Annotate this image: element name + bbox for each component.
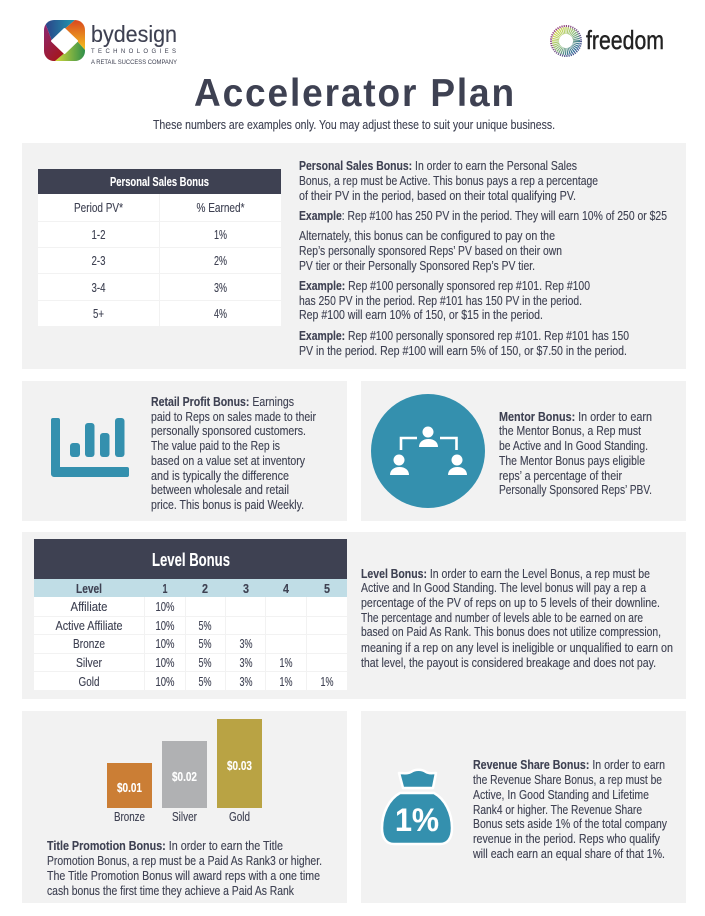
icon: money bag 1%: 1% (395, 802, 439, 838)
table: level bonus (34, 539, 347, 690)
table: personal sales bonus (38, 169, 281, 326)
text: retail profit bonus description: between wholesale and retail (151, 482, 289, 497)
table: level bonus: 3 (243, 581, 249, 596)
icon: money bag 1% (382, 770, 452, 844)
table: personal sales bonus: 2-3 (92, 253, 106, 268)
logo: bydesign technologies: bydesign (91, 21, 177, 47)
table: level bonus: 10% (156, 618, 175, 633)
table: personal sales bonus: 4% (214, 306, 227, 321)
table: level bonus: 5% (198, 674, 212, 689)
text: retail profit bonus description: based on a value set at inventory (151, 453, 305, 468)
text: personal sales bonus description: PV in the period. Rep #100 will earn 5% of 150, or $7.50 in the period. (299, 343, 627, 358)
table: personal sales bonus: 1-2 (92, 227, 106, 242)
table: level bonus: 5% (198, 618, 212, 633)
text: personal sales bonus description: Example: Rep #100 personally sponsored rep #101. Rep #101 has 150 (299, 328, 629, 343)
panel: mentor bonus (361, 381, 686, 521)
icon: bar chart (51, 418, 129, 477)
text: revenue share bonus description: Active, In Good Standing and Lifetime (473, 787, 649, 802)
text: retail profit bonus description: Retail Profit Bonus: Earnings (151, 394, 294, 409)
text: revenue share bonus description: will each earn an equal share of that 1%. (472, 846, 665, 861)
bar chart: title promotion amounts: $0.02 (172, 769, 197, 784)
table: level bonus: 3% (240, 636, 253, 651)
logo: bydesign technologies: TECHNOLOGIES (91, 49, 176, 55)
text: title promotion bonus description: Promotion Bonus, a rep must be a Paid As Rank3 or higher. (47, 853, 322, 868)
text: retail profit bonus description: and is typically the difference (151, 468, 289, 483)
text: retail profit bonus description (151, 394, 317, 512)
text: personal sales bonus description: Personal Sales Bonus: In order to earn the Personal Sales (299, 158, 577, 173)
table: level bonus: 5% (198, 636, 212, 651)
text: level bonus description: Level Bonus: In order to earn the Level Bonus, a rep must be (361, 566, 650, 581)
table: level bonus: 10% (156, 599, 175, 614)
bar chart: title promotion amounts: $0.01 (117, 780, 142, 795)
bar chart: title promotion amounts: Gold (229, 809, 250, 824)
table: level bonus: Gold (78, 674, 100, 689)
text: personal sales bonus description: Bonus, a rep must be Active. This bonus pays a rep a percentage (299, 173, 598, 188)
text: retail profit bonus description: The value paid to the Rep is (151, 438, 280, 453)
text: revenue share bonus description: Rank4 or higher. The Revenue Share (473, 802, 642, 817)
table: level bonus: 1% (320, 674, 334, 689)
table: level bonus: Level Bonus (152, 550, 230, 570)
text: personal sales bonus description: PV tier or their Personally Sponsored Rep’s PV tier. (299, 258, 535, 273)
table: level bonus: 5% (198, 655, 212, 670)
text: retail profit bonus description: personally sponsored customers. (151, 423, 306, 438)
text: personal sales bonus description: Rep’s personally sponsored Reps’ PV based on their own (299, 243, 562, 258)
table: personal sales bonus: 2% (214, 253, 227, 268)
table: level bonus: 2 (202, 581, 208, 596)
text: personal sales bonus description: Alternately, this bonus can be configured to pay on the (299, 228, 555, 243)
bar chart: title promotion amounts: Silver (172, 809, 198, 824)
text: mentor bonus description (499, 409, 652, 497)
title: Accelerator Plan (194, 72, 514, 115)
text: personal sales bonus description: has 250 PV in the period. Rep #101 has 150 PV in the period. (299, 293, 582, 308)
text: retail profit bonus description: price. This bonus is paid Weekly. (151, 497, 304, 512)
text: level bonus description (361, 566, 673, 670)
table: personal sales bonus: Period PV* (74, 200, 123, 215)
text: level bonus description: Active and In Good Standing. The level bonus will pay a rep a (361, 580, 647, 595)
table: level bonus: 10% (156, 655, 175, 670)
text: mentor bonus description: reps’ a percentage of their (499, 468, 623, 483)
bar chart: title promotion amounts (107, 719, 262, 824)
text: personal sales bonus description: of their PV in the period, based on their total qualifying PV. (299, 188, 576, 203)
text: title promotion bonus description: The Title Promotion Bonus will award reps with a one time (47, 868, 320, 883)
text: mentor bonus description: Mentor Bonus: In order to earn (499, 409, 652, 424)
panel: level bonus (22, 532, 686, 699)
table: personal sales bonus: 3-4 (92, 280, 106, 295)
logo: bydesign technologies: A RETAIL SUCCESS COMPANY (91, 60, 177, 66)
table: personal sales bonus: 3% (214, 280, 227, 295)
table: level bonus: 10% (156, 674, 175, 689)
bar chart: title promotion amounts: $0.03 (227, 758, 252, 773)
text: revenue share bonus description: Revenue Share Bonus: In order to earn (473, 757, 665, 772)
panel: retail profit bonus (22, 381, 347, 521)
table: level bonus: 10% (156, 636, 175, 651)
table: level bonus: 5 (324, 581, 330, 596)
table: level bonus: Active Affiliate (56, 618, 122, 633)
table: level bonus: 1 (162, 581, 168, 596)
panel: personal sales bonus (22, 143, 686, 369)
bar chart: title promotion amounts: Bronze (114, 809, 145, 824)
icon: mentor network circle (371, 394, 485, 508)
text: title promotion bonus description (47, 838, 322, 898)
text: personal sales bonus description: Example: Rep #100 personally sponsored rep #101. Rep #100 (299, 278, 590, 293)
logo: freedom (551, 25, 664, 56)
table: level bonus: 1% (280, 674, 293, 689)
table: level bonus: 3% (240, 674, 253, 689)
text: personal sales bonus description: Rep #100 will earn 10% of 150, or $15 in the period. (299, 307, 543, 322)
text: mentor bonus description: be Active and In Good Standing. (499, 438, 648, 453)
text: title promotion bonus description: Title Promotion Bonus: In order to earn the Title (47, 838, 283, 853)
panel: title promotion bonus (22, 711, 347, 903)
text: mentor bonus description: Personally Sponsored Reps’ PBV. (499, 482, 652, 497)
text: mentor bonus description: the Mentor Bonus, a Rep must (499, 423, 641, 438)
logo: freedom: freedom (586, 25, 664, 55)
table: level bonus: 1% (280, 655, 293, 670)
table: level bonus: 3% (240, 655, 253, 670)
text: retail profit bonus description: paid to Reps on sales made to their (151, 409, 317, 424)
text: revenue share bonus description: revenue in the period. Reps who qualify (473, 831, 660, 846)
table: level bonus: 4 (283, 581, 290, 596)
table: level bonus: Level (76, 581, 102, 596)
table: level bonus: Bronze (73, 636, 105, 651)
logo: bydesign technologies (44, 20, 177, 66)
table: personal sales bonus: 1% (214, 227, 227, 242)
table: level bonus: Affiliate (70, 599, 108, 614)
table: personal sales bonus: Personal Sales Bonus (110, 174, 209, 189)
subtitle: These numbers are examples only. You may adjust these to suit your unique business. (153, 117, 555, 132)
text: mentor bonus description: The Mentor Bonus pays eligible (499, 453, 645, 468)
table: level bonus: Silver (76, 655, 103, 670)
panel: revenue share bonus (361, 711, 686, 903)
text: title promotion bonus description: cash bonus the first time they achieve a Paid As Rank (47, 883, 294, 898)
table: personal sales bonus: % Earned* (196, 200, 244, 215)
table: personal sales bonus: 5+ (93, 306, 104, 321)
text: personal sales bonus description (299, 158, 667, 358)
text: revenue share bonus description (472, 757, 667, 861)
